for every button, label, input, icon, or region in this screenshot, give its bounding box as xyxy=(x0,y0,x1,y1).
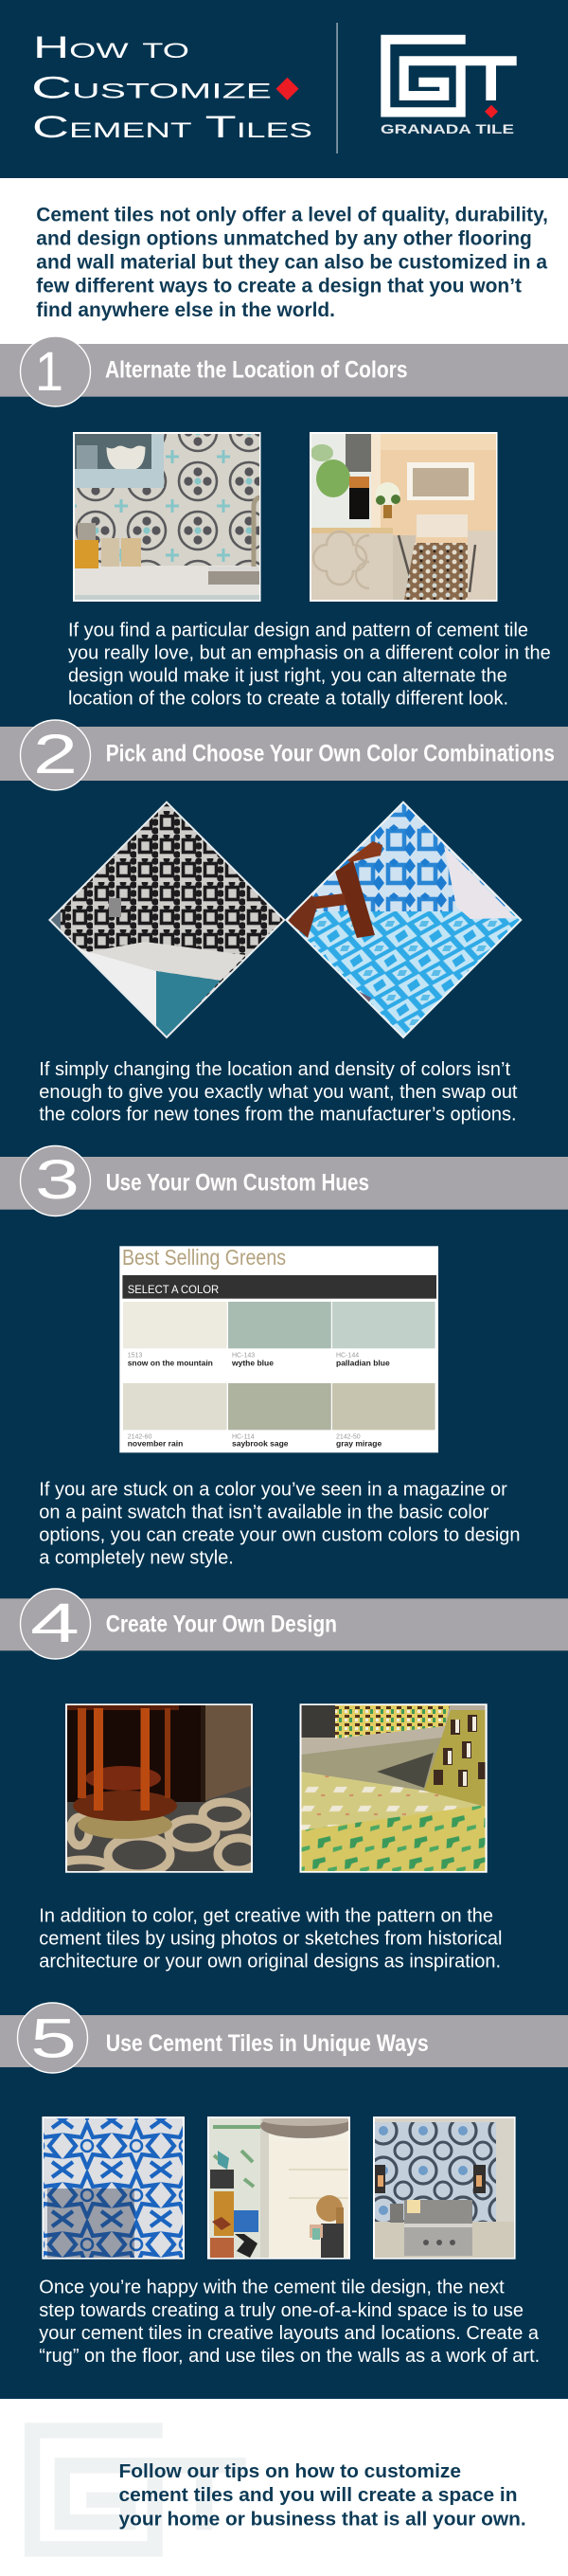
section 2 text: enough to give you exactly what you want, then swap out xyxy=(39,1082,518,1103)
section 1 heading band: Alternate the Location of Colors xyxy=(105,356,407,383)
section 4 heading band: Create Your Own Design xyxy=(106,1612,337,1638)
swatch: gray mirage xyxy=(332,1383,435,1449)
closing text: cement tiles and you will create a space in xyxy=(119,2484,517,2506)
section 2 text xyxy=(39,1059,518,1126)
photo: kitchen with tile runner xyxy=(310,432,498,602)
swatch: snow on the mountain: 1513 xyxy=(128,1353,142,1360)
swatch: november rain xyxy=(123,1383,227,1449)
section 4 heading band xyxy=(0,1589,568,1659)
title: Cement Tiles xyxy=(32,110,312,144)
section 2 heading band: 2 xyxy=(33,724,78,785)
title: Customize xyxy=(31,70,272,104)
section 4 text: In addition to color, get creative with the pattern on the xyxy=(39,1905,493,1926)
panel: paint swatch chart xyxy=(119,1245,438,1452)
section 4 text xyxy=(39,1905,502,1973)
closing text: Follow our tips on how to customize xyxy=(119,2460,461,2482)
dark body panel xyxy=(0,396,568,2399)
header panel xyxy=(0,0,568,178)
title: How to xyxy=(33,30,189,64)
section 1 text: you really love, but an emphasis on a different color in the xyxy=(68,643,551,664)
watermark logo xyxy=(25,2423,246,2557)
swatch: palladian blue: palladian blue xyxy=(336,1359,390,1368)
section 5 text: Once you’re happy with the cement tile design, the next xyxy=(39,2278,505,2298)
section 3 heading band: 3 xyxy=(35,1149,80,1211)
section 3 text: options, you can create your own custom colors to design xyxy=(39,1525,521,1546)
section 3 heading band xyxy=(0,1146,568,1216)
photo: black and white tile bath xyxy=(47,801,286,1039)
intro text: find anywhere else in the world. xyxy=(36,299,335,321)
section 1 text: location of the colors to create a totally different look. xyxy=(68,688,508,709)
swatch: wythe blue xyxy=(228,1302,331,1368)
swatch: november rain: 2142-60 xyxy=(128,1433,151,1440)
closing text xyxy=(119,2460,526,2530)
section 5 heading band xyxy=(0,2003,568,2073)
section 3 heading band: Use Your Own Custom Hues xyxy=(106,1170,369,1197)
section 5 text: step towards creating a truly one-of-a-kind space is to use xyxy=(39,2300,524,2321)
divider line xyxy=(336,23,338,153)
section 2 text: If simply changing the location and density of colors isn’t xyxy=(39,1059,510,1080)
photo: pedestal on patterned floor xyxy=(57,1703,259,1877)
swatch: palladian blue: HC-144 xyxy=(336,1353,359,1360)
swatch: wythe blue: HC-143 xyxy=(232,1353,255,1360)
footer panel xyxy=(0,2399,568,2576)
swatch: saybrook sage xyxy=(228,1383,331,1449)
swatch: saybrook sage: HC-114 xyxy=(232,1433,255,1440)
photo: blue and white tile floor xyxy=(284,801,523,1039)
section 5 heading band: Use Cement Tiles in Unique Ways xyxy=(106,2030,429,2057)
section 3 text xyxy=(39,1479,521,1569)
section 5 heading band: 5 xyxy=(30,2009,77,2069)
swatch: wythe blue: wythe blue xyxy=(231,1359,274,1368)
section 3 text: If you are stuck on a color you’ve seen in a magazine or xyxy=(39,1479,507,1500)
section 4 text: cement tiles by using photos or sketches from historical xyxy=(39,1929,502,1950)
photo: outdoor grill with tile wall xyxy=(373,2117,516,2260)
intro text: Cement tiles not only offer a level of quality, durability, xyxy=(36,204,548,225)
intro text: and design options unmatched by any other flooring xyxy=(36,227,532,249)
swatch: november rain: november rain xyxy=(128,1439,183,1449)
section 4 text: architecture or your own original designs as inspiration. xyxy=(39,1952,501,1973)
swatch: gray mirage: gray mirage xyxy=(336,1439,382,1449)
section 5 text: “rug” on the floor, and use tiles on the walls as a work of art. xyxy=(39,2346,540,2367)
section 4 heading band: 4 xyxy=(30,1593,80,1654)
intro text xyxy=(36,204,548,321)
section 2 heading band xyxy=(0,720,568,790)
photo: kitchen backsplash xyxy=(73,432,261,602)
section 2 text: the colors for new tones from the manufacturer’s options. xyxy=(39,1105,517,1126)
swatch chart title: Best Selling Greens xyxy=(122,1245,286,1270)
section 3 text: a completely new style. xyxy=(39,1548,234,1569)
swatch: snow on the mountain: snow on the mountain xyxy=(128,1359,213,1368)
section 3 text: on a paint swatch that isn’t available in the basic color xyxy=(39,1502,489,1522)
intro text: few different ways to create a design that you won’t xyxy=(36,275,522,297)
section 1 text xyxy=(68,621,551,709)
icon: red diamond xyxy=(276,78,299,100)
swatch: palladian blue xyxy=(332,1302,435,1368)
swatch: snow on the mountain xyxy=(123,1302,227,1368)
section 5 text xyxy=(39,2278,540,2367)
photo: green and yellow tile floor xyxy=(299,1703,488,1873)
intro text: and wall material but they can also be customized in a xyxy=(36,251,547,273)
logo: Granada Tile: GRANADA TILE xyxy=(381,121,514,136)
title xyxy=(31,30,312,144)
closing text: your home or business that is all your own. xyxy=(119,2508,526,2530)
photo: mixed tile column and window xyxy=(207,2114,351,2260)
section 5 text: your cement tiles in creative layouts and locations. Create a xyxy=(39,2323,540,2344)
photo: blue star tile niche xyxy=(42,2117,185,2260)
section 1 heading band xyxy=(0,336,568,406)
select a color bar xyxy=(122,1275,436,1299)
swatch: saybrook sage: saybrook sage xyxy=(232,1439,289,1449)
section 1 text: design would make it just right, you can alternate the xyxy=(68,665,507,686)
logo: Granada Tile xyxy=(381,35,517,136)
swatch: gray mirage: 2142-50 xyxy=(336,1433,361,1440)
section 1 heading band: 1 xyxy=(35,341,63,403)
select a color bar: SELECT A COLOR xyxy=(128,1285,219,1296)
section 1 text: If you find a particular design and pattern of cement tile xyxy=(68,621,528,641)
